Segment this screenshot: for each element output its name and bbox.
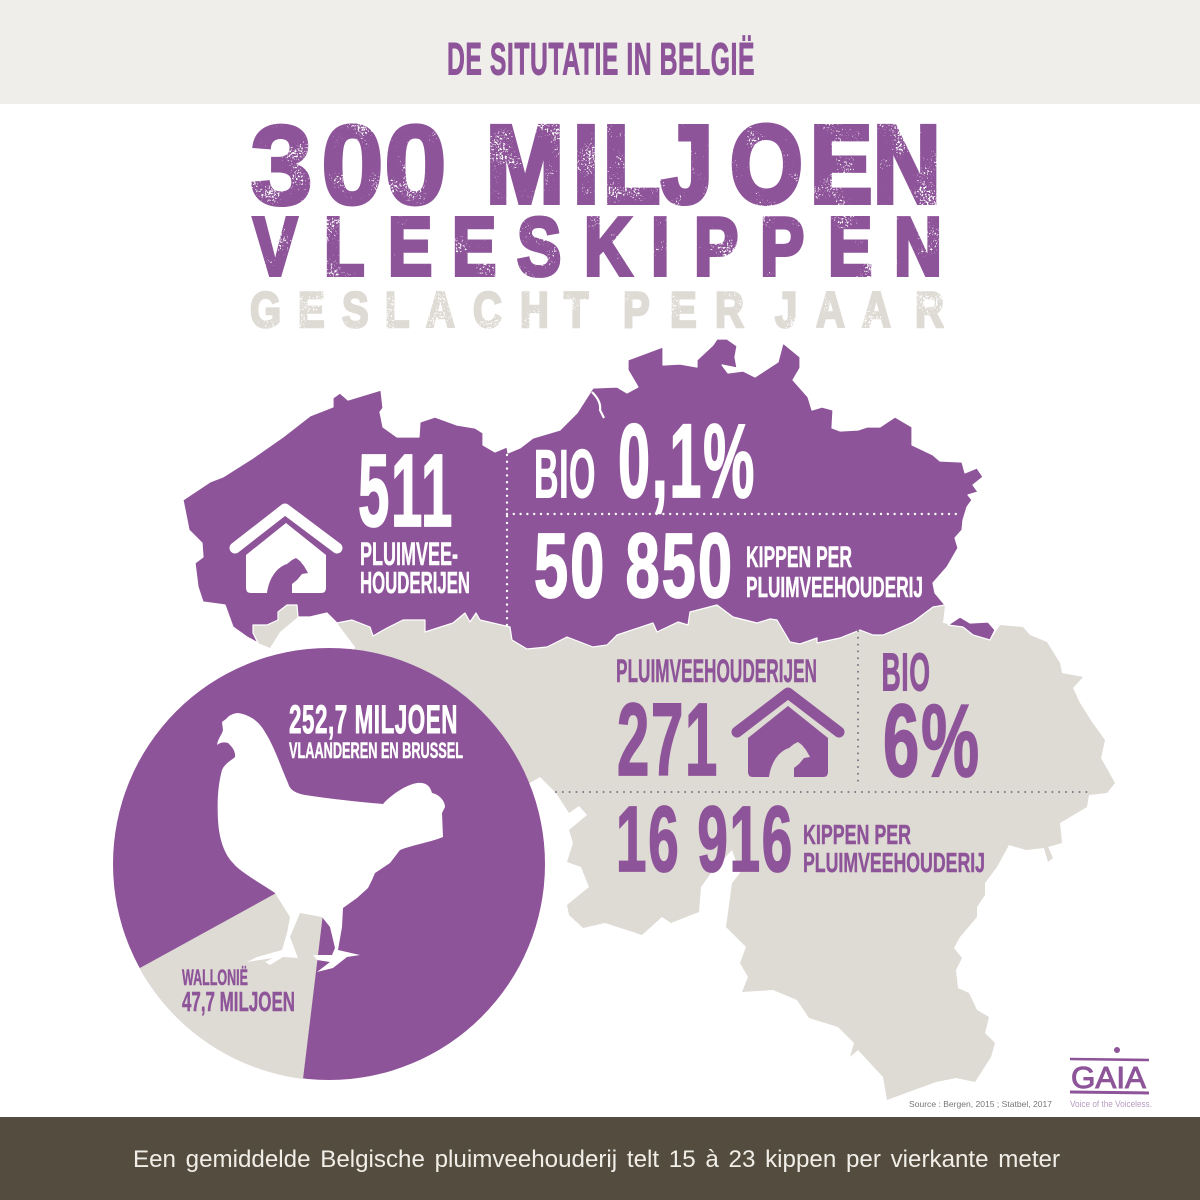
footer text: Een gemiddelde Belgische pluimveehouderij telt 15 à 23 kippen per vierkante meter [133,1146,1060,1173]
stat: chickens per farm Wallonia: PLUIMVEEHOUDERIJ [803,847,985,878]
stat: organic Flanders: 0,1% [618,403,756,520]
label farms: PLUIMVEE- [360,536,458,572]
pie slice: Flanders and Brussels [113,648,545,1080]
stat: organic Flanders [534,403,756,520]
icon: chicken house Wallonia [737,693,839,777]
stat: 271 farms Wallonia: PLUIMVEEHOUDERIJEN [616,653,817,689]
region: Voeren [948,617,995,640]
title word: miljoen: MILJOEN [486,103,941,226]
stat: 511 farms: HOUDERIJEN [360,565,470,600]
stat: chickens per farm Flanders: 50 850 [534,515,734,617]
footer band [0,1117,1200,1200]
logo: GAIA: Voice of the Voiceless. [1070,1099,1152,1109]
pie slice: Wallonia [140,864,329,1079]
title line: geslacht per jaar: GESLACHT PER JAAR [250,282,944,338]
logo: GAIA [1070,1047,1152,1109]
header title: DE SITUTATIE IN BELGIË [447,34,755,84]
stat: organic Wallonia: BIO [882,642,930,702]
stat: organic Wallonia: 6% [883,683,981,798]
icon: chicken house Flanders [235,509,337,593]
pie chart: 47,7 MILJOEN [182,986,295,1017]
main title [250,102,944,338]
dotted dividers: Wallonia [556,631,1091,792]
map of Belgium [183,339,1115,1100]
stat: chickens per farm Flanders: PLUIMVEEHOUDERIJ [746,572,923,604]
region: Wallonia [337,590,1115,1100]
stat: 271 farms Wallonia: 271 [617,682,719,797]
header band [0,0,1200,104]
stat: chickens per farm Flanders: KIPPEN PER [746,541,852,574]
title line: vleeskippen: VLEESKIPPEN [253,200,942,293]
dotted dividers: Flanders [507,455,962,628]
region: Scheldt inlet [592,392,604,418]
pie chart: VLAANDEREN EN BRUSSEL [289,738,463,763]
number 511: 511 [358,433,454,548]
stat: 511 farms [358,433,470,600]
pie label: Flanders: 252,7 MILJOEN [289,698,458,742]
stat: organic Flanders: BIO [534,436,596,512]
region: Flanders [183,339,983,649]
title number: 300: 300 [250,102,447,228]
pie label: Wallonia: WALLONIË [182,965,248,990]
logo: GAIA: GAIA [1071,1060,1146,1095]
stat: chickens per farm Wallonia: KIPPEN PER [803,819,911,850]
pie chart [113,648,545,1080]
source note: Source : Bergen, 2015 ; Statbel, 2017 [909,1099,1052,1109]
region: Comines enclave [253,605,298,648]
chicken silhouette [217,713,445,972]
stat: chickens per farm Wallonia: 16 916 [616,787,794,891]
stat: organic Wallonia [882,642,981,798]
